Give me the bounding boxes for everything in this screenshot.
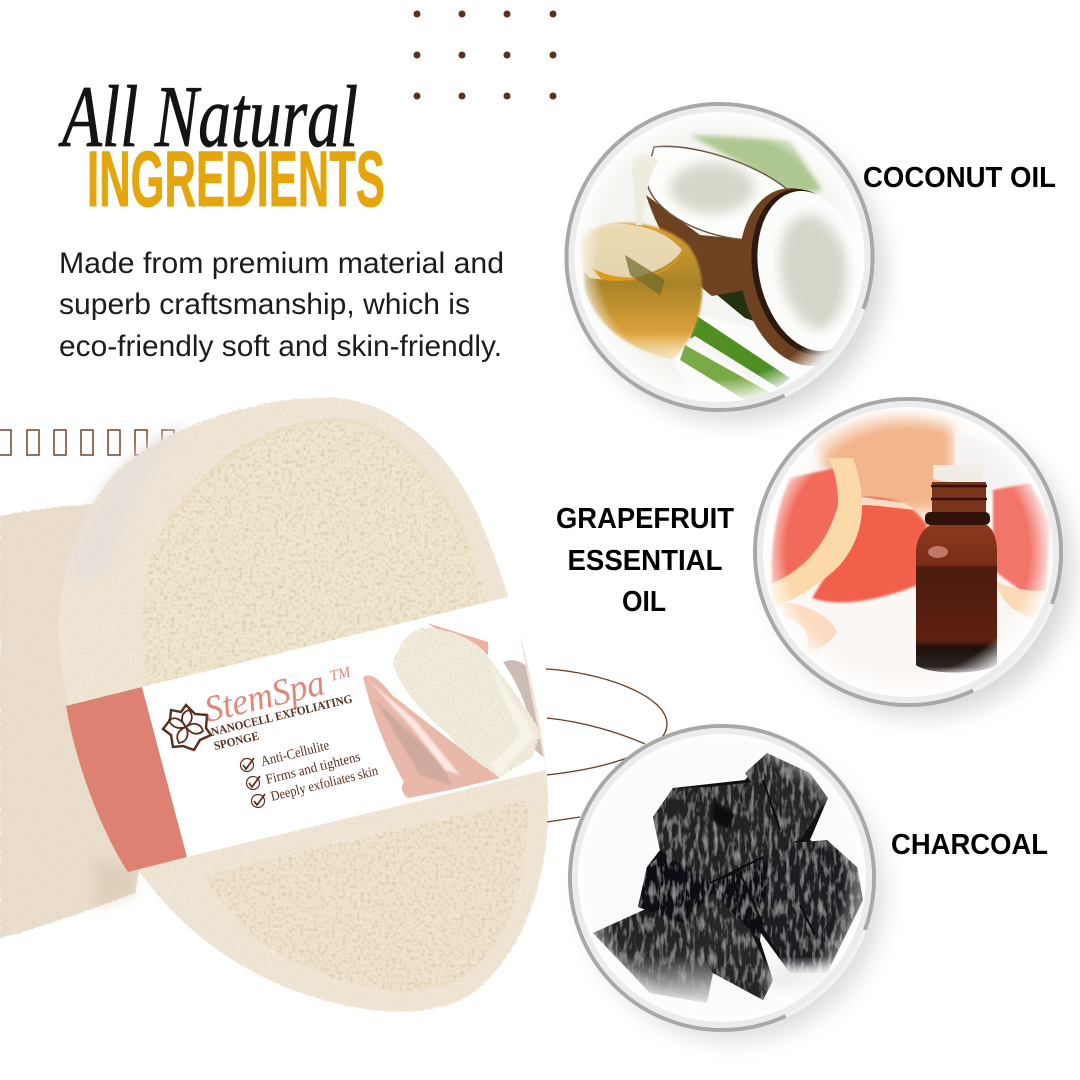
logo mark	[163, 705, 211, 750]
label: grapefruit essential oil: ESSENTIAL	[568, 545, 722, 577]
glass ring	[755, 399, 1061, 705]
product name: SPONGE	[212, 729, 260, 753]
background fruit	[808, 412, 953, 512]
shadow	[770, 417, 1074, 717]
description text	[59, 247, 504, 363]
back coconut shell	[646, 195, 752, 296]
sponge body	[59, 398, 548, 1012]
pink band end	[66, 687, 187, 872]
charcoal photo	[593, 753, 863, 1003]
label: charcoal: CHARCOAL	[891, 829, 1048, 861]
dark leaf under shell	[717, 290, 754, 321]
sponge inner panel	[143, 420, 505, 740]
left wedge	[772, 468, 842, 585]
title: INGREDIENTS: INGREDIENTS	[87, 134, 385, 223]
glass ring	[570, 726, 874, 1030]
green frond	[690, 135, 822, 195]
shadow	[584, 745, 884, 1041]
ingredient circle: charcoal	[560, 720, 884, 1041]
benefit list: Anti-Cellulite	[259, 738, 331, 770]
glass table highlight	[672, 315, 792, 386]
label: grapefruit essential oil: GRAPEFRUIT	[556, 503, 734, 535]
hand	[363, 660, 547, 798]
row of placeholder glyph boxes	[0, 430, 174, 455]
label: grapefruit essential oil: OIL	[622, 586, 666, 618]
product name: NANOCELL EXFOLIATING	[209, 691, 354, 739]
description text: eco-friendly soft and skin-friendly.	[59, 330, 502, 363]
back coconut flesh	[646, 146, 793, 240]
ingredient circle: grapefruit essential oil	[750, 395, 1074, 717]
sponge panel seam	[170, 420, 470, 550]
description text: superb craftsmanship, which is	[59, 288, 470, 321]
benefit list: Deeply exfoliates skin	[269, 764, 380, 805]
white band	[142, 596, 546, 857]
lower rind	[783, 602, 837, 655]
sponge lower panel	[205, 800, 528, 991]
photo sponge	[393, 628, 540, 777]
front sponge	[59, 398, 548, 1012]
glass ring	[566, 104, 872, 410]
decorative dot grid	[414, 10, 556, 100]
benefit list: Firms and tightens	[264, 750, 362, 788]
description text: Made from premium material and	[59, 247, 504, 280]
trademark: TM	[328, 664, 354, 685]
ingredient circle: coconut oil	[560, 100, 885, 422]
right segment	[993, 483, 1050, 595]
label: grapefruit essential oil	[556, 503, 734, 618]
shadow	[581, 122, 885, 422]
left edge shading	[66, 420, 190, 585]
coconut photo	[580, 124, 862, 400]
charcoal underlay	[638, 753, 863, 1000]
pink strip on sponge	[427, 623, 488, 655]
benefit list	[240, 738, 380, 808]
product band label	[66, 596, 547, 872]
oil flask	[579, 154, 702, 360]
label: coconut oil: COCONUT OIL	[863, 162, 1056, 194]
back sponge	[0, 504, 170, 938]
essential oil bottle	[916, 465, 997, 673]
charcoal pieces	[593, 753, 863, 1003]
middle segment	[812, 497, 927, 602]
title script: All Natural: All Natural	[58, 69, 358, 166]
green leaf stripes	[690, 316, 790, 392]
hand holding sponge photo	[363, 623, 547, 798]
front coconut shell	[742, 188, 862, 366]
front coconut flesh	[757, 191, 862, 351]
brand name: StemSpa	[201, 662, 329, 731]
grapefruit photo	[770, 407, 1051, 680]
orbit lines	[546, 669, 667, 822]
